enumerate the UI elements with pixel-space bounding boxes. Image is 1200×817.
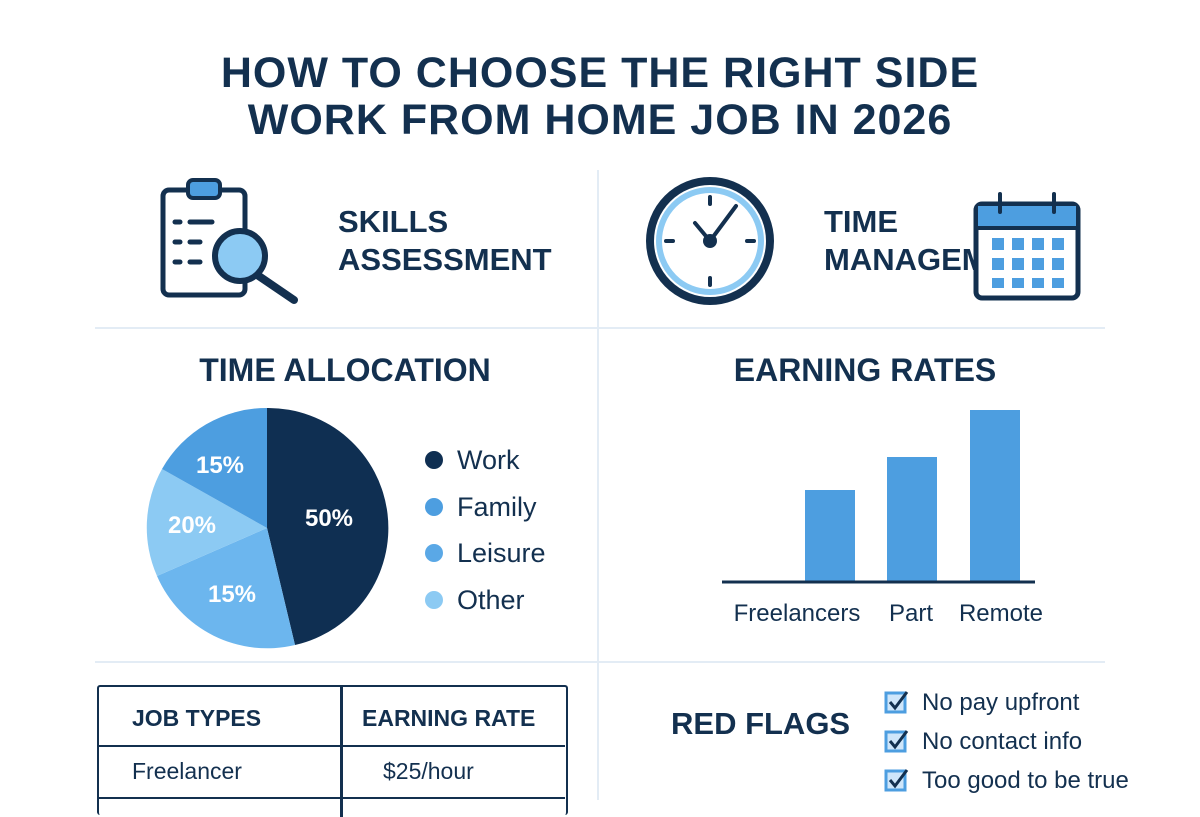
- checklist: Too good to be true: [922, 767, 1129, 794]
- heading: skills assessment: SKILLS: [338, 204, 448, 239]
- table header: EARNING RATE: [362, 705, 535, 731]
- pie chart: [146, 408, 388, 648]
- table row: $25/hour: [383, 758, 474, 784]
- bar chart: Part: [889, 600, 933, 627]
- icon: clock: [646, 177, 774, 305]
- table header: JOB TYPES: [132, 705, 261, 731]
- pie chart: 15%: [208, 581, 256, 608]
- heading: skills assessment: [338, 204, 552, 277]
- bar chart: Remote: [959, 600, 1043, 627]
- pie chart: 15%: [196, 452, 244, 479]
- heading: time allocation: TIME ALLOCATION: [199, 352, 491, 388]
- heading: skills assessment: ASSESSMENT: [338, 242, 552, 277]
- title: HOW TO CHOOSE THE RIGHT SIDE: [221, 49, 979, 97]
- table header: [99, 687, 565, 747]
- pie chart: 50%: [305, 505, 353, 532]
- checkboxes: [884, 691, 908, 792]
- title: [221, 49, 979, 144]
- pie chart: 20%: [168, 512, 216, 539]
- legend: Work: [457, 445, 520, 475]
- table: [97, 685, 568, 815]
- legend: Other: [457, 585, 525, 615]
- table row: [99, 747, 565, 799]
- checklist: No pay upfront: [922, 689, 1079, 716]
- checklist: No contact info: [922, 728, 1082, 755]
- heading: earning rates: EARNING RATES: [734, 352, 996, 388]
- bar chart: [722, 410, 1043, 627]
- legend: Family: [457, 492, 537, 522]
- icon: calendar: [974, 192, 1080, 300]
- heading: red flags: RED FLAGS: [671, 706, 850, 741]
- bar chart: Freelancers: [734, 600, 860, 627]
- checklist: [884, 689, 1129, 794]
- heading: time management: [824, 204, 974, 277]
- icon: clipboard with magnifier: [160, 178, 298, 304]
- heading: time management: TIME: [824, 204, 898, 239]
- table row: Freelancer: [132, 758, 242, 784]
- legend: Leisure: [457, 538, 546, 568]
- title: WORK FROM HOME JOB IN 2026: [248, 96, 952, 144]
- legend: [425, 445, 546, 615]
